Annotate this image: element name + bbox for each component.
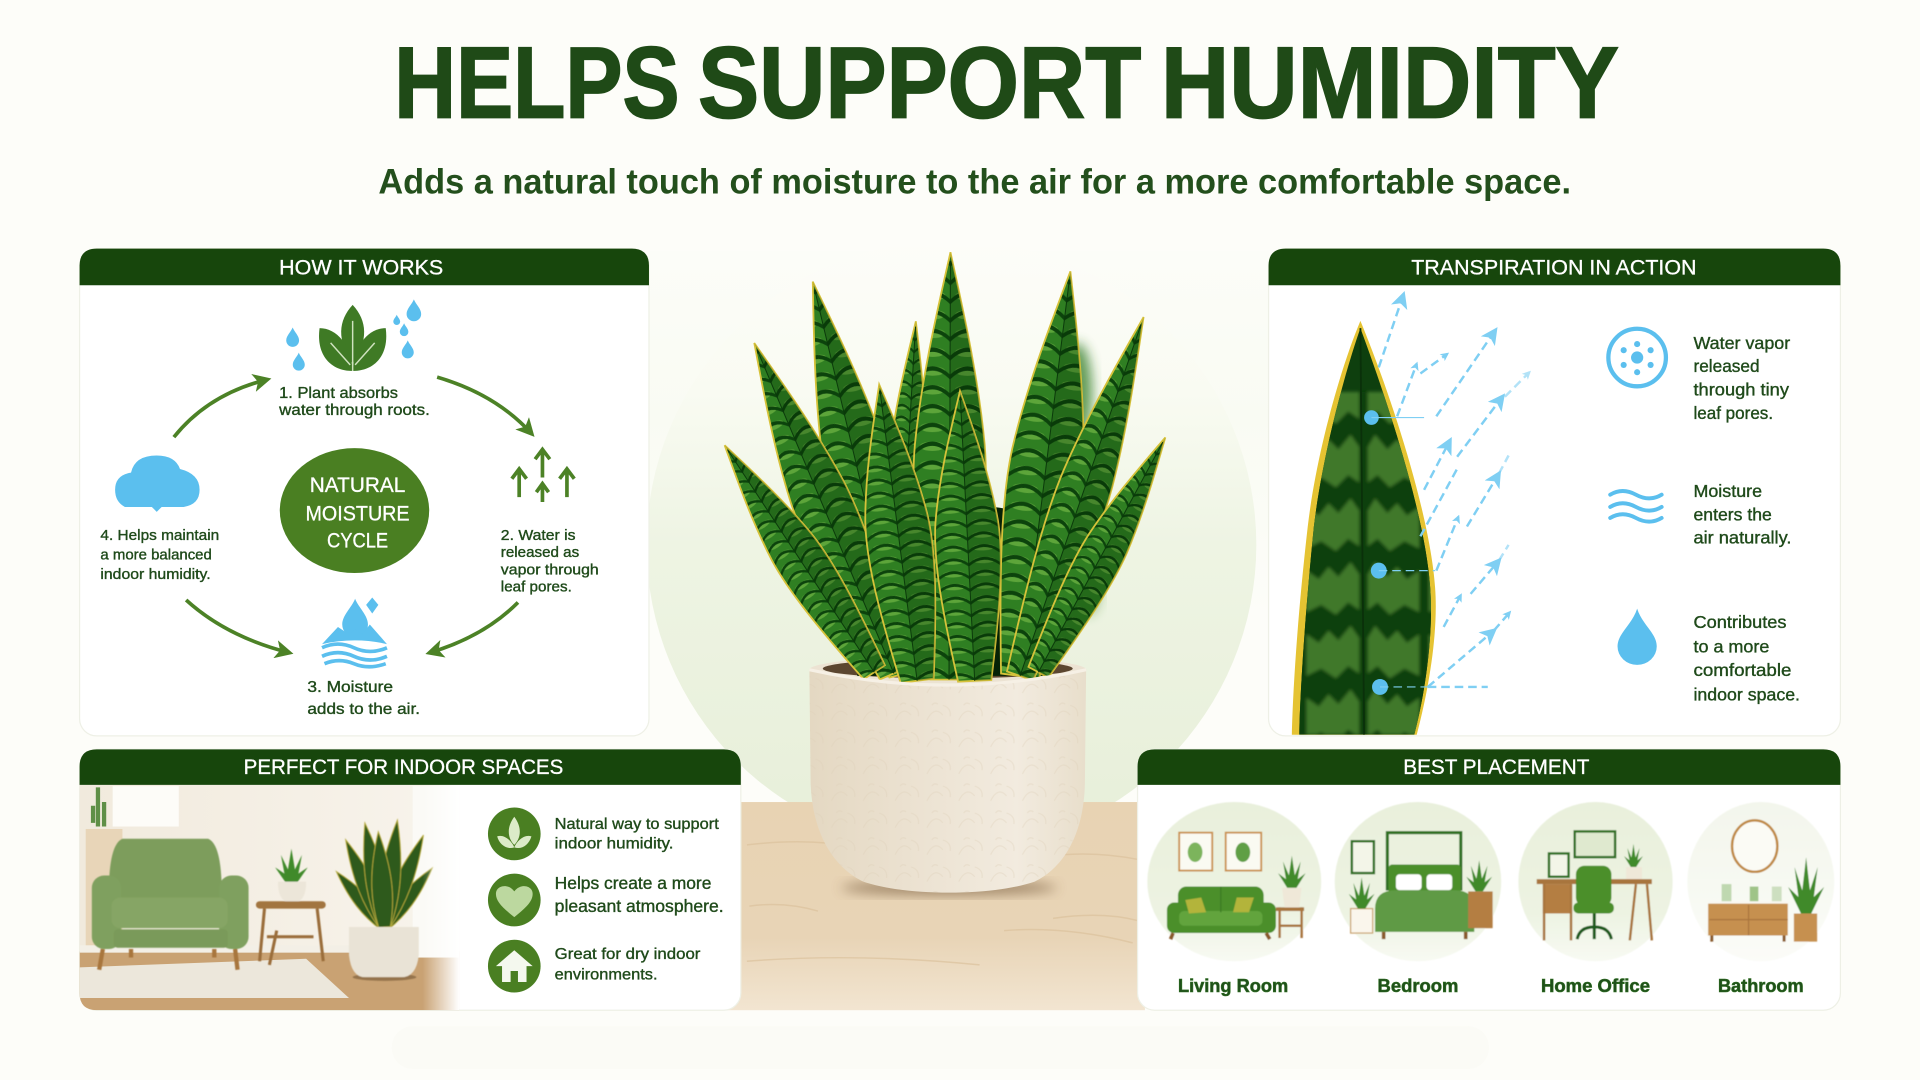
step 4 text: indoor humidity.: [100, 567, 211, 583]
icon: house badge: [488, 940, 541, 992]
step 3 text: adds to the air.: [307, 701, 420, 718]
step 1 text: 1. Plant absorbs: [279, 385, 398, 402]
side table with small plant: [256, 849, 326, 965]
label: living room: Living Room: [1178, 975, 1288, 996]
plant leaves: [704, 252, 1185, 686]
panel: best placement: [1138, 749, 1840, 1010]
step 1 text: [278, 385, 430, 419]
center badge: natural moisture cycle: NATURAL: [310, 474, 405, 497]
text: contributes: to a more: [1693, 637, 1769, 657]
text: water vapor: Water vapor: [1693, 333, 1791, 353]
header bar: [1138, 749, 1840, 785]
pot shadow: [841, 880, 1057, 895]
step 4 text: a more balanced: [100, 548, 212, 564]
header bar: PERFECT FOR INDOOR SPACES: [244, 756, 563, 779]
panel: perfect for indoor spaces: [80, 749, 741, 1010]
pore markers: [1364, 410, 1388, 695]
icon: water drop: [1618, 609, 1657, 665]
text: contributes: Contributes: [1693, 612, 1787, 632]
armchair: [92, 839, 249, 970]
header bar: [80, 749, 741, 785]
step 2 text: released as: [501, 545, 579, 561]
header bar: HOW IT WORKS: [279, 256, 443, 279]
text: helps create: pleasant atmosphere.: [555, 896, 724, 916]
step 2 text: leaf pores.: [501, 579, 572, 595]
text: moisture enters: Moisture: [1693, 481, 1762, 501]
text: contributes: [1693, 612, 1800, 704]
backdrop: pale green halo behind plant: [647, 240, 1269, 850]
header bar: [80, 249, 649, 285]
center badge: natural moisture cycle: [280, 448, 429, 573]
text: natural way: [555, 816, 719, 853]
text: helps create: [555, 873, 724, 916]
icon: water drop over waves: [322, 598, 387, 667]
subtitle: Adds a natural touch of moisture to the air for a more comfortable space.: [378, 161, 1571, 201]
central snake plant in pot: [704, 252, 1185, 895]
header bar: [1269, 249, 1840, 285]
room: living room: [1147, 802, 1321, 961]
room: home office: [1518, 802, 1673, 961]
leaf close-up: [1292, 321, 1439, 735]
text: great for dry: Great for dry indoor: [555, 946, 701, 963]
arrow: step 2 to 3: [430, 602, 518, 653]
icon: cloud: [115, 456, 200, 512]
room illustration: [80, 785, 459, 1010]
icon: heart badge: [488, 874, 541, 926]
panel: how it works: [80, 249, 649, 736]
text: great for dry: environments.: [555, 967, 658, 984]
pot rim and soil: [809, 656, 1086, 683]
title: SUPPORT: [698, 26, 1141, 140]
label: home office: Home Office: [1541, 975, 1650, 996]
label: bedroom: Bedroom: [1378, 975, 1458, 996]
center badge: natural moisture cycle: CYCLE: [327, 529, 388, 552]
step 1 text: water through roots.: [278, 402, 430, 419]
step 2 text: [501, 528, 599, 595]
text: contributes: indoor space.: [1693, 684, 1800, 704]
faint bottom bar: [392, 1026, 1489, 1069]
text: moisture enters: air naturally.: [1693, 528, 1791, 548]
room: bathroom: [1687, 802, 1834, 961]
arrow: step 4 to 1: [174, 380, 267, 437]
floor plant in pot: [331, 819, 438, 981]
arrow: step 1 to 2: [437, 377, 531, 433]
icon: air waves: [1610, 491, 1662, 522]
step 4 text: 4. Helps maintain: [100, 528, 219, 544]
center badge: natural moisture cycle: MOISTURE: [306, 502, 410, 525]
header bar: TRANSPIRATION IN ACTION: [1411, 256, 1697, 279]
text: water vapor: through tiny: [1693, 380, 1789, 400]
title: [394, 26, 1619, 140]
text: great for dry: [555, 946, 701, 984]
icon: leaf pore circle: [1608, 329, 1666, 386]
room: bedroom: [1335, 802, 1501, 961]
icon: leaf badge: [488, 808, 541, 860]
text: contributes: comfortable: [1693, 660, 1791, 680]
text: water vapor: released: [1693, 356, 1760, 376]
title: HELPS: [394, 26, 680, 140]
pot body: [809, 670, 1086, 893]
icon: upward vapor arrows: [512, 449, 574, 502]
step 3 text: 3. Moisture: [307, 679, 393, 696]
text: water vapor: leaf pores.: [1693, 403, 1773, 423]
step 2 text: 2. Water is: [501, 528, 576, 544]
text: natural way: indoor humidity.: [555, 836, 673, 853]
step 4 text: [100, 528, 219, 583]
text: natural way: Natural way to support: [555, 816, 719, 833]
vapor arrows: [1371, 295, 1529, 687]
header bar: BEST PLACEMENT: [1403, 756, 1590, 779]
title: HUMIDITY: [1161, 26, 1619, 140]
text: helps create: Helps create a more: [555, 873, 711, 893]
arrow: step 4 to 3: [186, 600, 289, 653]
step 2 text: vapor through: [501, 562, 599, 578]
icon: leaves with water drops: [286, 299, 421, 371]
text: moisture enters: enters the: [1693, 504, 1772, 524]
label: bathroom: Bathroom: [1718, 975, 1804, 996]
wooden table top: [649, 802, 1145, 1010]
step 3 text: [307, 679, 420, 718]
panel: transpiration in action: [1269, 249, 1840, 736]
text: water vapor: [1693, 333, 1791, 423]
text: moisture enters: [1693, 481, 1791, 548]
